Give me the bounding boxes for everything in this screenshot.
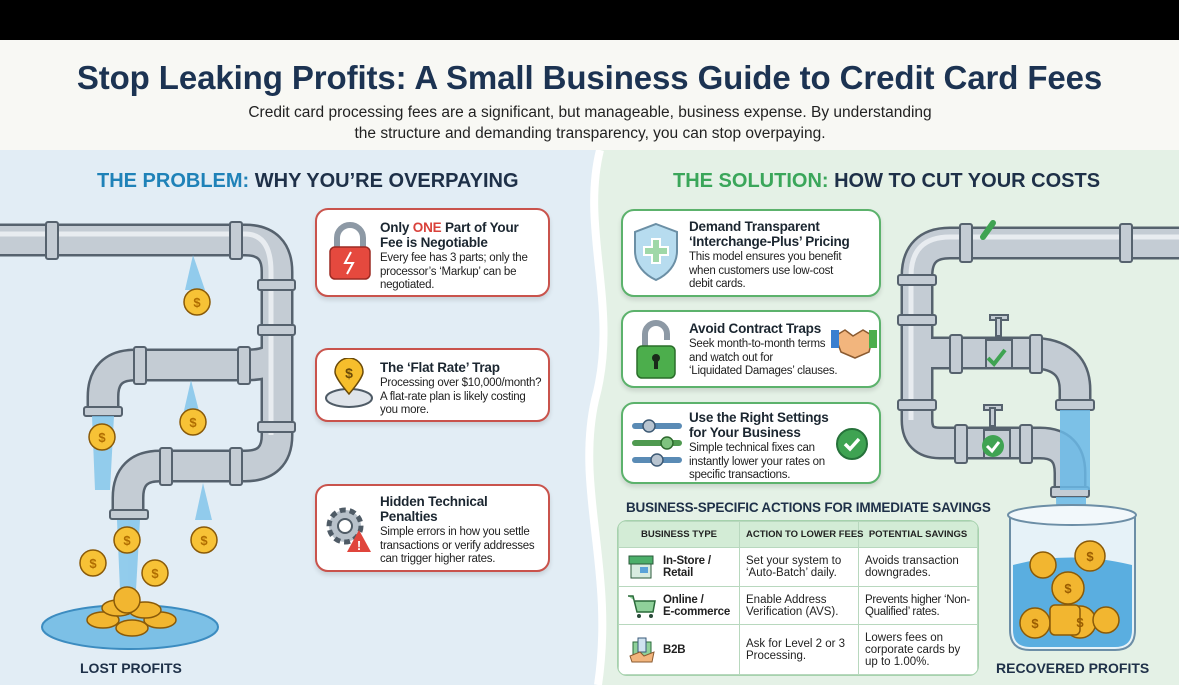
- icon: green lock: [636, 320, 676, 379]
- card: interchange-plus: when customers use low-cost: [689, 264, 833, 276]
- table: business actions: E-commerce: [663, 606, 730, 618]
- card: hidden technical penalties: Hidden Technical: [380, 494, 488, 509]
- card: right settings: Simple technical fixes can: [689, 442, 815, 454]
- card: hidden technical penalties: can trigger higher rates.: [380, 553, 495, 565]
- card: flat rate trap: Processing over $10,000/month?: [380, 377, 541, 389]
- right pipes illustration: $: [1064, 581, 1072, 596]
- card: contract traps: and watch out for: [689, 352, 773, 364]
- background panels: [0, 150, 1179, 685]
- card: flat rate trap: A flat-rate plan is likely costing: [380, 390, 526, 402]
- subtitle: [248, 104, 932, 142]
- card: interchange-plus: debit cards.: [689, 278, 745, 290]
- table: business actions: ACTION TO LOWER FEES: [746, 529, 864, 540]
- card: right settings: for Your Business: [689, 425, 801, 440]
- subtitle: the structure and demanding transparency, you can stop overpaying.: [354, 125, 826, 142]
- left pipes illustration: $: [98, 430, 106, 445]
- card: contract traps: [621, 310, 881, 388]
- left pipes illustration: $: [89, 556, 97, 571]
- card: interchange-plus: [621, 209, 881, 297]
- icon: gear warning: !: [357, 538, 361, 553]
- title: Stop Leaking Profits: A Small Business Guide to Credit Card Fees: [77, 59, 1102, 96]
- heading: problem: THE PROBLEM: WHY YOU’RE OVERPAYING: [97, 170, 519, 192]
- table: business actions: In-Store /: [663, 555, 711, 567]
- card: contract traps: Seek month-to-month terms: [689, 338, 825, 350]
- card: interchange-plus: This model ensures you benefit: [689, 251, 841, 263]
- right pipes illustration: $: [1086, 549, 1094, 564]
- card: hidden technical penalties: Simple errors in how you settle: [380, 526, 529, 538]
- card: only one part negotiable: Every fee has 3 parts; only the: [380, 252, 528, 264]
- right pipes illustration: $: [1076, 615, 1084, 630]
- table: business actions: POTENTIAL SAVINGS: [869, 529, 967, 540]
- left pipes illustration: $: [189, 415, 197, 430]
- left pipes illustration: $: [151, 566, 159, 581]
- label: recovered profits: RECOVERED PROFITS: [996, 660, 1149, 676]
- card: only one part negotiable: processor’s ‘Markup’ can be: [380, 266, 516, 278]
- icon: trap: $: [345, 365, 353, 381]
- card: only one part negotiable: Only ONE Part of Your: [380, 220, 519, 235]
- card: right settings: Use the Right Settings: [689, 410, 829, 425]
- left pipes illustration: $: [123, 533, 131, 548]
- left pipes illustration: $: [200, 533, 208, 548]
- icon: check circle: [836, 428, 868, 460]
- icon: sliders: [632, 419, 682, 467]
- table: business actions: Avoids transaction downgrades.: [865, 555, 959, 579]
- card: interchange-plus: ‘Interchange-Plus’ Pricing: [689, 234, 850, 249]
- icon: broken lock: [329, 222, 371, 280]
- right pipes illustration: $: [1031, 616, 1039, 631]
- label: lost profits: LOST PROFITS: [80, 660, 182, 676]
- card: hidden technical penalties: transactions or verify addresses: [380, 540, 534, 552]
- card: interchange-plus: Demand Transparent: [689, 219, 820, 234]
- table: business actions: Lowers fees on corporate cards by up to 1.00%.: [865, 632, 960, 668]
- table: business actions: Ask for Level 2 or 3 Processing.: [746, 638, 845, 662]
- card: only one part negotiable: [315, 208, 550, 297]
- table: business actions: Online /: [663, 594, 704, 606]
- table: business actions: [617, 520, 979, 676]
- table: business actions: Enable Address Verification (AVS).: [746, 594, 838, 618]
- card: right settings: instantly lower your rates on: [689, 456, 825, 468]
- card: flat rate trap: you more.: [380, 404, 429, 416]
- icon: gear warning: [326, 508, 371, 553]
- card: right settings: [621, 402, 881, 484]
- card: only one part negotiable: Fee is Negotiable: [380, 235, 488, 250]
- icon: handshake: [831, 329, 877, 359]
- card: hidden technical penalties: [315, 484, 550, 572]
- card: hidden technical penalties: Penalties: [380, 509, 437, 524]
- card: right settings: specific transactions.: [689, 469, 790, 481]
- table: business actions: B2B: [663, 644, 685, 656]
- heading: solution: THE SOLUTION: HOW TO CUT YOUR COSTS: [673, 170, 1100, 192]
- left pipes illustration: [0, 221, 296, 650]
- left pipes illustration: $: [193, 295, 201, 310]
- top black bar: [0, 0, 1179, 40]
- table: business actions: BUSINESS TYPE: [641, 529, 717, 540]
- table: business actions: Set your system to ‘Auto-Batch’ daily.: [746, 555, 841, 579]
- card: flat rate trap: [315, 348, 550, 422]
- card: contract traps: ‘Liquidated Damages’ clauses.: [689, 365, 837, 377]
- card: only one part negotiable: negotiated.: [380, 279, 434, 291]
- card: flat rate trap: The ‘Flat Rate’ Trap: [380, 360, 500, 375]
- right pipes illustration: [897, 220, 1179, 651]
- table: business actions: Prevents higher ‘Non-Qualified’ rates.: [865, 594, 970, 618]
- table title: BUSINESS-SPECIFIC ACTIONS FOR IMMEDIATE SAVINGS: [626, 500, 991, 515]
- table: business actions: Retail: [663, 567, 693, 579]
- card: contract traps: Avoid Contract Traps: [689, 321, 821, 336]
- subtitle: Credit card processing fees are a significant, but manageable, business expense. By understanding: [248, 104, 932, 121]
- icon: trap: [325, 358, 373, 408]
- icon: shield: [634, 222, 678, 281]
